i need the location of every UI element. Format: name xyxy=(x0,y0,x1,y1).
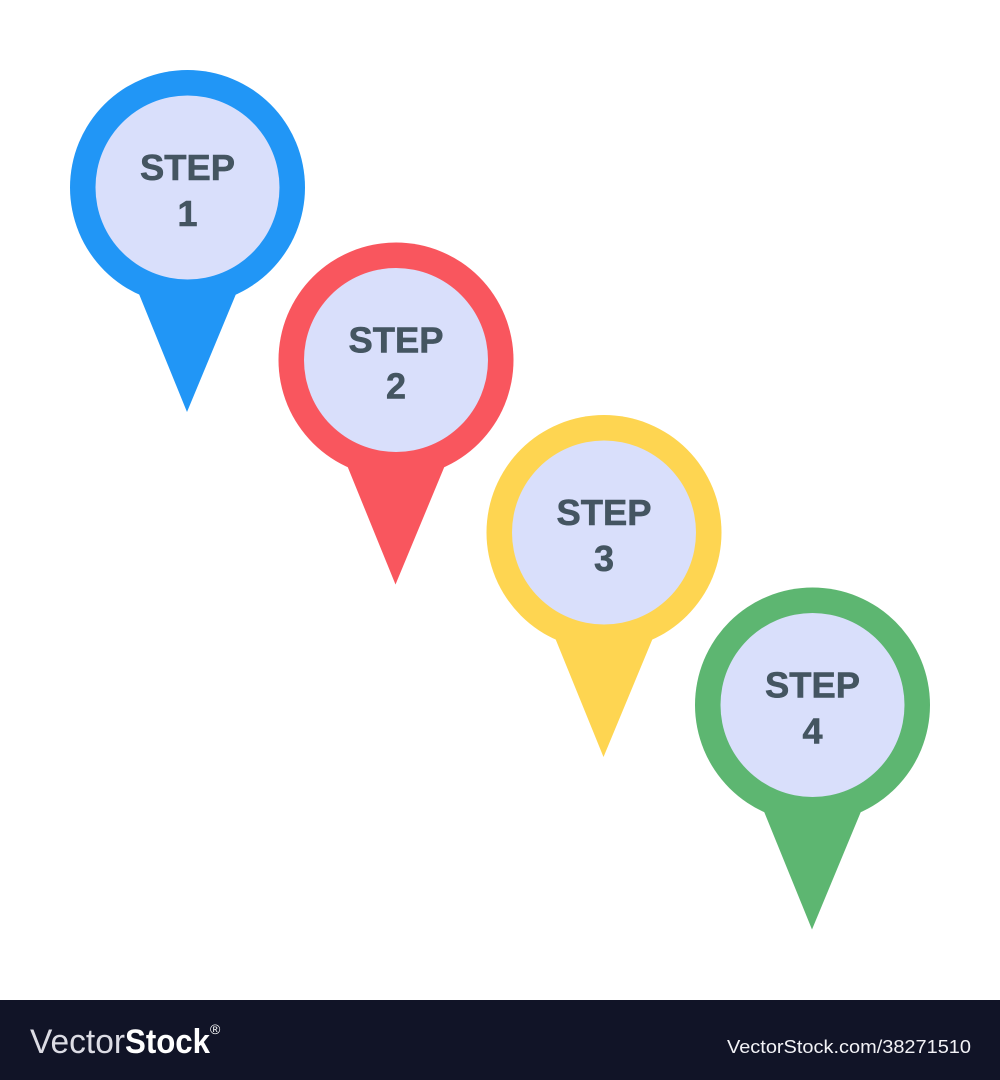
label: step 3: STEP xyxy=(556,492,652,533)
label: step 4: STEP xyxy=(765,664,860,706)
footer logo: ® xyxy=(210,1021,221,1037)
label: step 3: 3 xyxy=(594,538,614,579)
pin: step 1 xyxy=(70,70,305,412)
footer image id: VectorStock.com/38271510 xyxy=(727,1037,971,1057)
label: step 4: 4 xyxy=(802,710,823,752)
label: step 1: STEP xyxy=(140,147,235,188)
inner disc xyxy=(720,613,904,797)
pin: step 4 xyxy=(695,588,930,930)
footer logo: VectorStock xyxy=(30,1023,218,1061)
pin: step 2 xyxy=(278,242,514,584)
pin body: yellow xyxy=(486,415,722,757)
label: step 1: 1 xyxy=(177,193,198,234)
pin: step 3 xyxy=(486,415,722,757)
inner disc xyxy=(304,268,488,452)
pin body: blue xyxy=(70,70,305,412)
inner disc xyxy=(512,440,696,624)
pin body: red xyxy=(278,242,514,584)
label: step 2: 2 xyxy=(386,366,406,406)
pin body: green xyxy=(695,588,930,930)
footer bar xyxy=(0,1000,1000,1080)
inner disc xyxy=(96,96,280,280)
label: step 2: STEP xyxy=(348,320,444,360)
